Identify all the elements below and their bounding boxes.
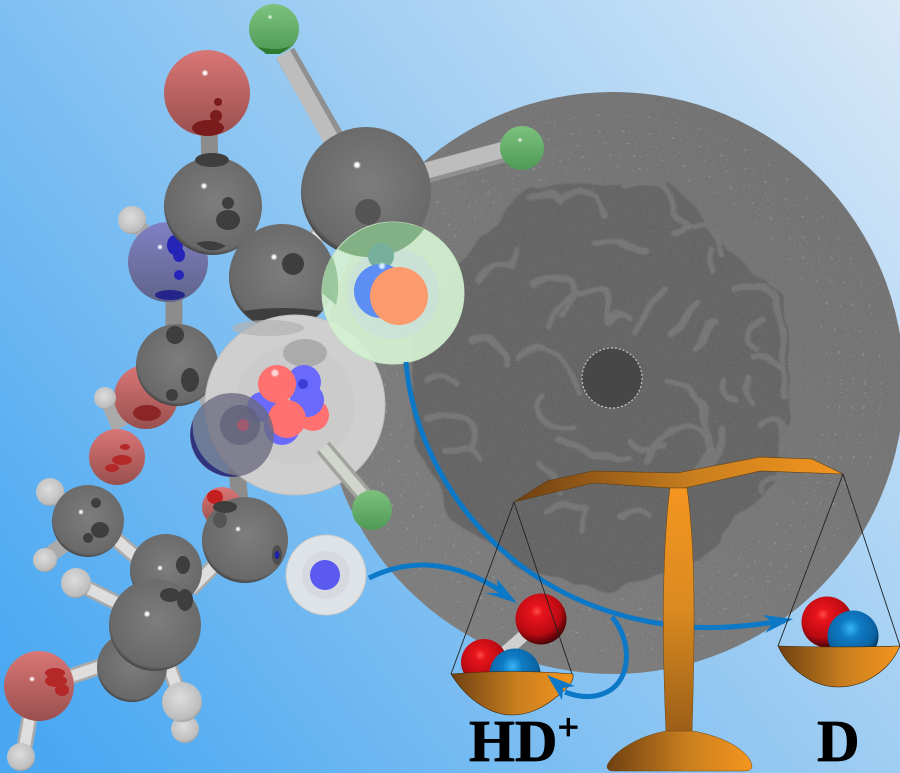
translucent green shell with nucleus [322, 222, 464, 364]
blue pathway arrows [369, 362, 793, 633]
central hole [582, 348, 642, 408]
scale beam [514, 457, 843, 502]
left pan with HD+ molecule [451, 502, 573, 715]
right pan with D atom [778, 474, 900, 687]
translucent deuterium shell with nucleus [205, 315, 392, 530]
molecule model [4, 4, 544, 771]
scale base [607, 731, 752, 771]
label: D: D [817, 708, 860, 773]
scale pole [663, 488, 694, 732]
translucent nitrogen overlay [190, 393, 274, 477]
arrow: from hydrogen to HD+ [369, 565, 517, 603]
hydrogen atoms (white) [7, 206, 202, 771]
oxygen atoms [4, 50, 250, 721]
label: HD+: + [558, 707, 579, 749]
label: HD+: HD [469, 708, 558, 773]
electron microscope image of disk [322, 92, 900, 674]
bonds [24, 53, 510, 750]
green atoms [249, 4, 544, 170]
specular highlights [30, 16, 522, 681]
surface noise texture [322, 92, 900, 674]
nitrogen atom [128, 222, 208, 302]
arrow: from green atom to D pan [406, 362, 793, 633]
arrow: recoil to HD+ pan [547, 617, 626, 700]
carbon atoms [30, 16, 522, 702]
eroded inner region [410, 183, 788, 592]
balance scale [451, 457, 900, 771]
reflections on carbons [83, 153, 381, 611]
small translucent hydrogen with nucleus [286, 535, 366, 615]
